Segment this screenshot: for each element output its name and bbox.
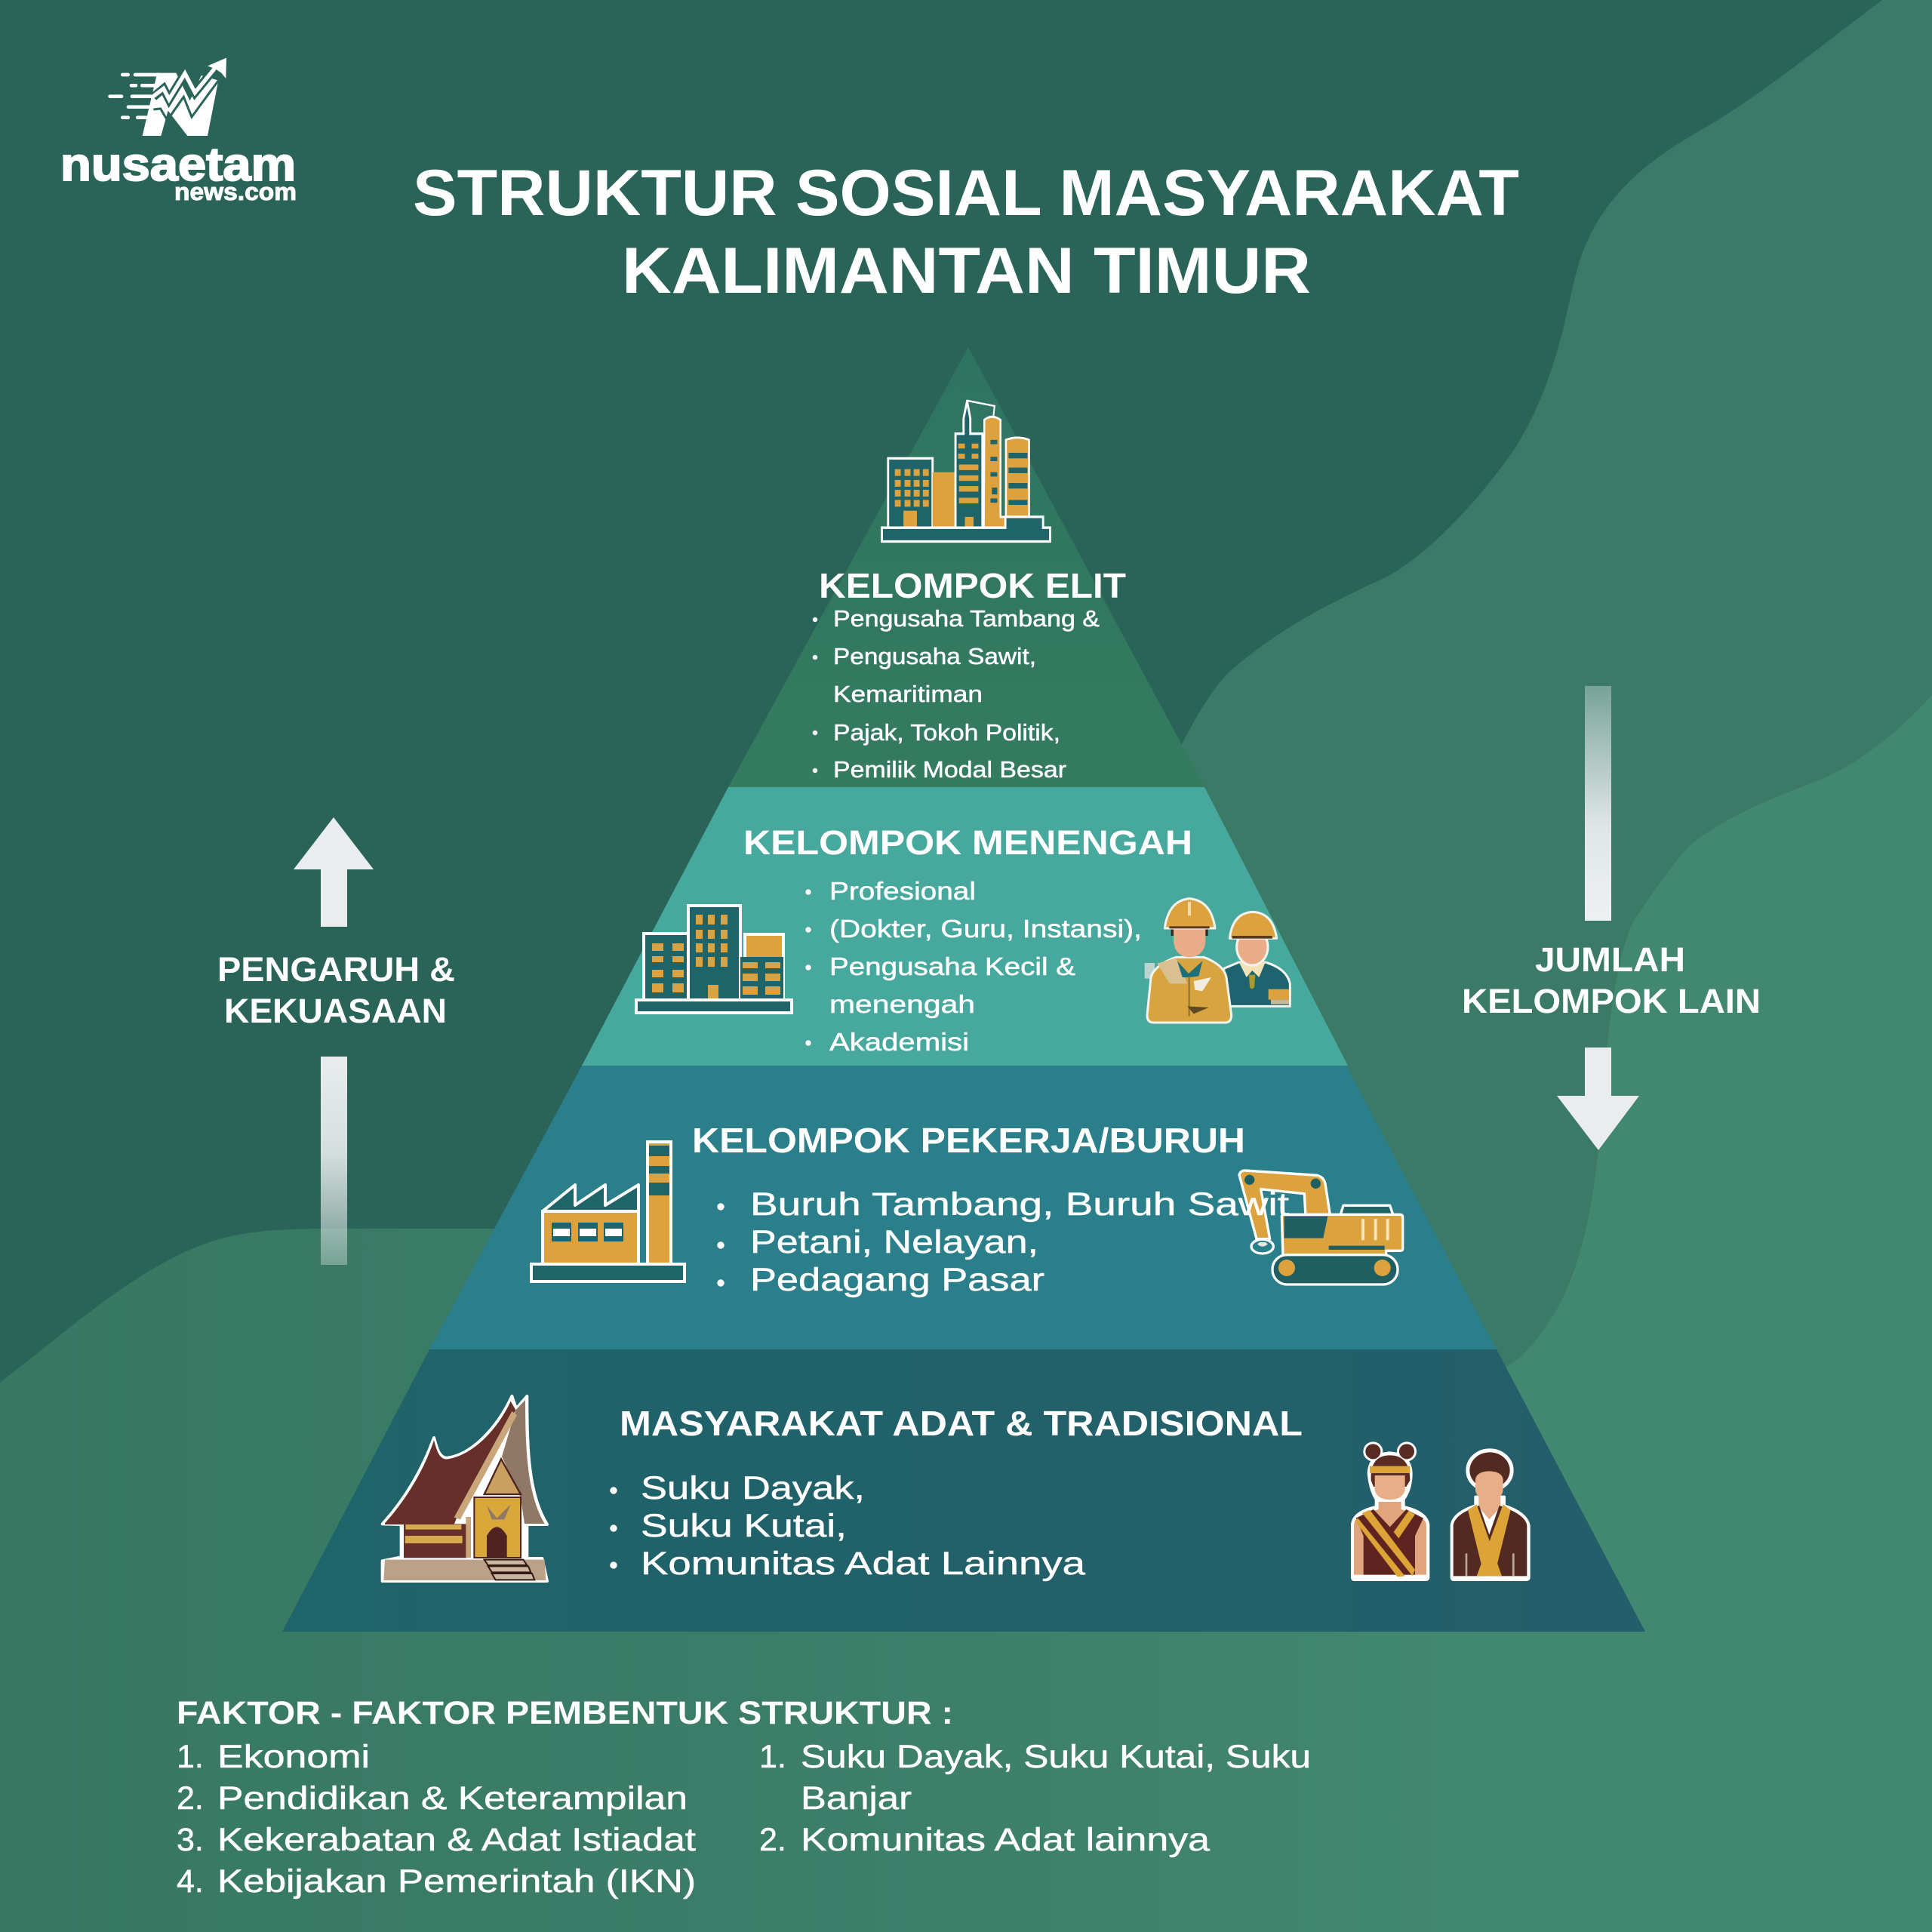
list: pekerja: Buruh Tambang, Buruh Sawit	[750, 1186, 1289, 1223]
list: suku: Suku Dayak, Suku Kutai, Suku	[801, 1739, 1311, 1775]
icon: office buildings	[636, 906, 792, 1013]
list: elit: Kemaritiman	[833, 681, 983, 707]
icon: traditional people	[1352, 1443, 1529, 1580]
list: menengah: Akademisi	[829, 1028, 969, 1056]
title: STRUKTUR SOSIAL MASYARAKAT	[413, 157, 1519, 229]
label: pengaruh & kekuasaan: KEKUASAAN	[224, 992, 447, 1030]
list: menengah: Profesional	[829, 877, 976, 905]
title: KALIMANTAN TIMUR	[622, 235, 1311, 307]
list: elit: Pajak, Tokoh Politik,	[833, 719, 1060, 746]
pyramid tier 2: menengah	[582, 787, 1348, 1066]
list: menengah: menengah	[829, 990, 975, 1018]
list: faktor: Ekonomi	[217, 1739, 370, 1775]
list: elit: Pengusaha Sawit,	[833, 643, 1036, 669]
icon: workers	[1145, 899, 1290, 1023]
text block: faktor pembentuk struktur	[177, 1695, 953, 1900]
list: faktor: Kekerabatan & Adat Istiadat	[217, 1822, 696, 1858]
icon: factory	[531, 1142, 685, 1281]
logo: nusaetam news.com	[60, 58, 297, 205]
list: elit	[813, 605, 1100, 783]
icon: traditional house	[383, 1396, 547, 1581]
arrow: pengaruh up	[294, 817, 374, 1265]
list: suku: 1.	[759, 1739, 786, 1775]
label: jumlah kelompok lain: KELOMPOK LAIN	[1462, 982, 1761, 1020]
list: suku: Banjar	[801, 1780, 912, 1817]
logo: nusaetam news.com: news.com	[174, 178, 297, 205]
list: suku	[759, 1739, 1311, 1858]
list: suku: Komunitas Adat lainnya	[801, 1822, 1210, 1858]
list: adat	[610, 1470, 1085, 1582]
label: jumlah kelompok lain: JUMLAH	[1535, 940, 1685, 979]
pyramid tier 4: masyarakat adat	[282, 1349, 1645, 1632]
list: menengah	[806, 877, 1142, 1056]
list: pekerja: Petani, Nelayan,	[750, 1224, 1038, 1260]
list: faktor: Pendidikan & Keterampilan	[217, 1780, 688, 1817]
arrow: jumlah down	[1557, 686, 1639, 1150]
icon: excavator	[1239, 1171, 1403, 1284]
list: faktor: 3.	[177, 1822, 204, 1858]
list: adat: Komunitas Adat Lainnya	[641, 1546, 1085, 1582]
list: pekerja: Pedagang Pasar	[750, 1262, 1044, 1298]
label: jumlah kelompok lain	[1462, 940, 1761, 1020]
text block: faktor pembentuk struktur: FAKTOR - FAKTOR PEMBENTUK STRUKTUR :	[177, 1695, 953, 1731]
list: faktor	[177, 1739, 696, 1900]
list: elit: Pengusaha Tambang &	[833, 605, 1100, 632]
label: pengaruh & kekuasaan: PENGARUH &	[217, 950, 455, 989]
list: suku: 2.	[759, 1822, 786, 1858]
list: elit: Pemilik Modal Besar	[833, 756, 1066, 783]
heading: kelompok elit: KELOMPOK ELIT	[819, 566, 1126, 605]
heading: masyarakat adat & tradisional: MASYARAKAT ADAT & TRADISIONAL	[620, 1404, 1303, 1443]
list: faktor: Kebijakan Pemerintah (IKN)	[217, 1863, 696, 1900]
heading: kelompok menengah: KELOMPOK MENENGAH	[743, 823, 1192, 862]
list: faktor: 2.	[177, 1780, 204, 1817]
list: pekerja	[717, 1186, 1289, 1298]
list: faktor: 4.	[177, 1863, 204, 1900]
title	[413, 157, 1519, 307]
list: adat: Suku Dayak,	[641, 1470, 865, 1506]
pyramid tier 3: pekerja/buruh	[429, 1066, 1497, 1349]
list: faktor: 1.	[177, 1739, 204, 1775]
logo: nusaetam news.com: nusaetam	[60, 139, 296, 191]
heading: kelompok pekerja/buruh: KELOMPOK PEKERJA/BURUH	[692, 1121, 1245, 1160]
list: menengah: (Dokter, Guru, Instansi),	[829, 915, 1142, 943]
label: pengaruh & kekuasaan	[217, 950, 455, 1030]
pyramid tier 1: elit	[728, 347, 1204, 787]
icon: city skyline	[882, 401, 1050, 542]
list: adat: Suku Kutai,	[641, 1508, 847, 1544]
list: menengah: Pengusaha Kecil &	[829, 952, 1075, 980]
